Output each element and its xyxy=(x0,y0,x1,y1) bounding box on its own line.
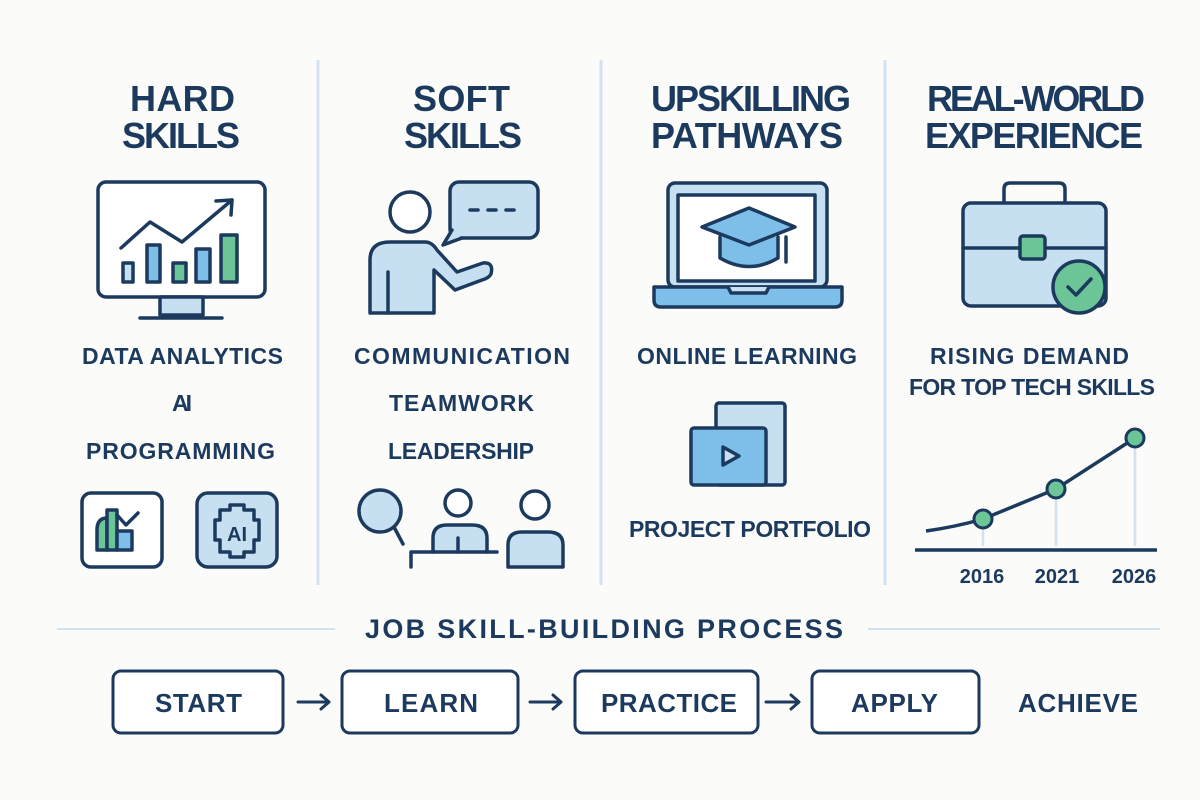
heading: real-world experience: REAL-WORLD xyxy=(927,78,1145,119)
heading: soft skills: SKILLS xyxy=(404,115,522,156)
text: hard skill list: AI xyxy=(172,390,192,416)
process section: LEARN xyxy=(384,688,478,718)
icon: monitor with chart xyxy=(98,182,265,318)
heading: real-world experience xyxy=(925,78,1145,156)
icon: laptop with graduation cap xyxy=(654,183,842,307)
heading: upskilling pathways: UPSKILLING xyxy=(651,78,851,119)
process section xyxy=(113,614,1138,733)
process steps xyxy=(113,671,979,733)
heading: job skill-building process: JOB SKILL-BUILDING PROCESS xyxy=(365,614,843,644)
arrows between steps xyxy=(298,695,799,709)
text: online learning: ONLINE LEARNING xyxy=(637,343,857,369)
text: soft skill list xyxy=(354,343,570,464)
icon: AI chip badge: AI xyxy=(227,524,247,546)
chart: demand line xyxy=(915,429,1157,588)
process section: APPLY xyxy=(851,688,938,718)
panel: upskilling pathways xyxy=(629,78,871,542)
heading: upskilling pathways: PATHWAYS xyxy=(651,115,843,156)
text: soft skill list: LEADERSHIP xyxy=(388,438,534,464)
icon: project portfolio xyxy=(691,403,785,485)
text: hard skill list: DATA ANALYTICS xyxy=(82,343,283,369)
icon: AI chip badge xyxy=(197,493,277,567)
text: soft skill list: COMMUNICATION xyxy=(354,343,570,369)
heading: hard skills xyxy=(122,78,240,156)
text: hard skill list xyxy=(82,343,283,464)
heading: real-world experience: EXPERIENCE xyxy=(925,115,1143,156)
panel: soft skills xyxy=(354,78,570,567)
icon: speaking person xyxy=(370,182,538,313)
heading: upskilling pathways xyxy=(651,78,851,156)
heading: hard skills: HARD xyxy=(130,78,235,119)
text: rising demand: FOR TOP TECH SKILLS xyxy=(909,374,1155,400)
icon: team and search xyxy=(359,490,563,567)
heading: soft skills xyxy=(404,78,522,156)
panel: real-world experience xyxy=(909,78,1157,588)
heading: hard skills: SKILLS xyxy=(122,115,240,156)
icon: small chart badge xyxy=(82,493,162,567)
icon: briefcase with check xyxy=(963,183,1106,313)
chart: demand line: 2016 xyxy=(960,566,1004,588)
text: soft skill list: TEAMWORK xyxy=(389,390,534,416)
chart: demand line: 2021 xyxy=(1035,566,1079,588)
heading: soft skills: SOFT xyxy=(413,78,510,119)
text: rising demand: RISING DEMAND xyxy=(930,343,1129,369)
process section: PRACTICE xyxy=(601,688,737,718)
chart: demand line: 2026 xyxy=(1112,566,1156,588)
panel: hard skills xyxy=(82,78,283,567)
process section: ACHIEVE xyxy=(1018,688,1138,718)
process section: START xyxy=(155,688,242,718)
text: hard skill list: PROGRAMMING xyxy=(86,438,275,464)
text: rising demand xyxy=(909,343,1155,400)
text: project portfolio: PROJECT PORTFOLIO xyxy=(629,516,871,542)
